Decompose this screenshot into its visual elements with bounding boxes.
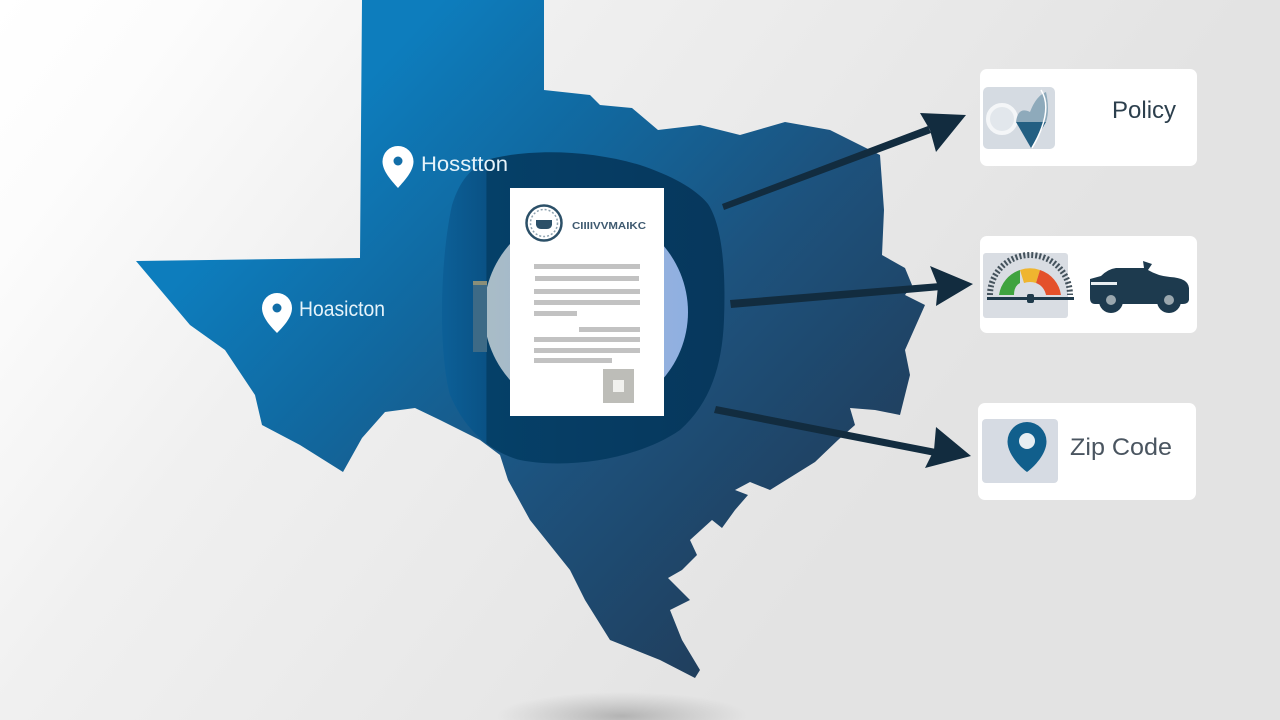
city label: lower: Hoasicton <box>299 298 385 321</box>
map: Texas silhouette <box>136 0 925 678</box>
ground shadow <box>497 692 747 720</box>
city label: upper: Hosstton <box>421 153 508 176</box>
card: policy <box>980 69 1197 166</box>
icon: score gauge <box>983 253 1074 318</box>
card: zip code <box>978 403 1196 500</box>
light disc <box>484 210 688 414</box>
document heading: CIIIIVVMAIKC <box>572 220 646 232</box>
central lens circle <box>442 152 724 463</box>
icon: car <box>1090 261 1189 313</box>
side tab <box>473 281 487 352</box>
map pin: lower <box>262 293 292 333</box>
policy label: Policy <box>1112 97 1176 124</box>
document seal <box>526 206 562 240</box>
icon: globe and shield <box>983 87 1055 149</box>
arrow: to policy <box>722 113 966 210</box>
map pin: upper <box>382 146 414 188</box>
zip code label: Zip Code <box>1070 434 1172 461</box>
arrow: to zip code <box>714 406 971 468</box>
arrow: to score <box>730 266 973 308</box>
document stamp <box>603 369 634 403</box>
document <box>510 188 664 416</box>
card: credit score and vehicle <box>980 236 1197 333</box>
icon: location pin <box>982 419 1058 483</box>
document text lines <box>534 264 640 363</box>
